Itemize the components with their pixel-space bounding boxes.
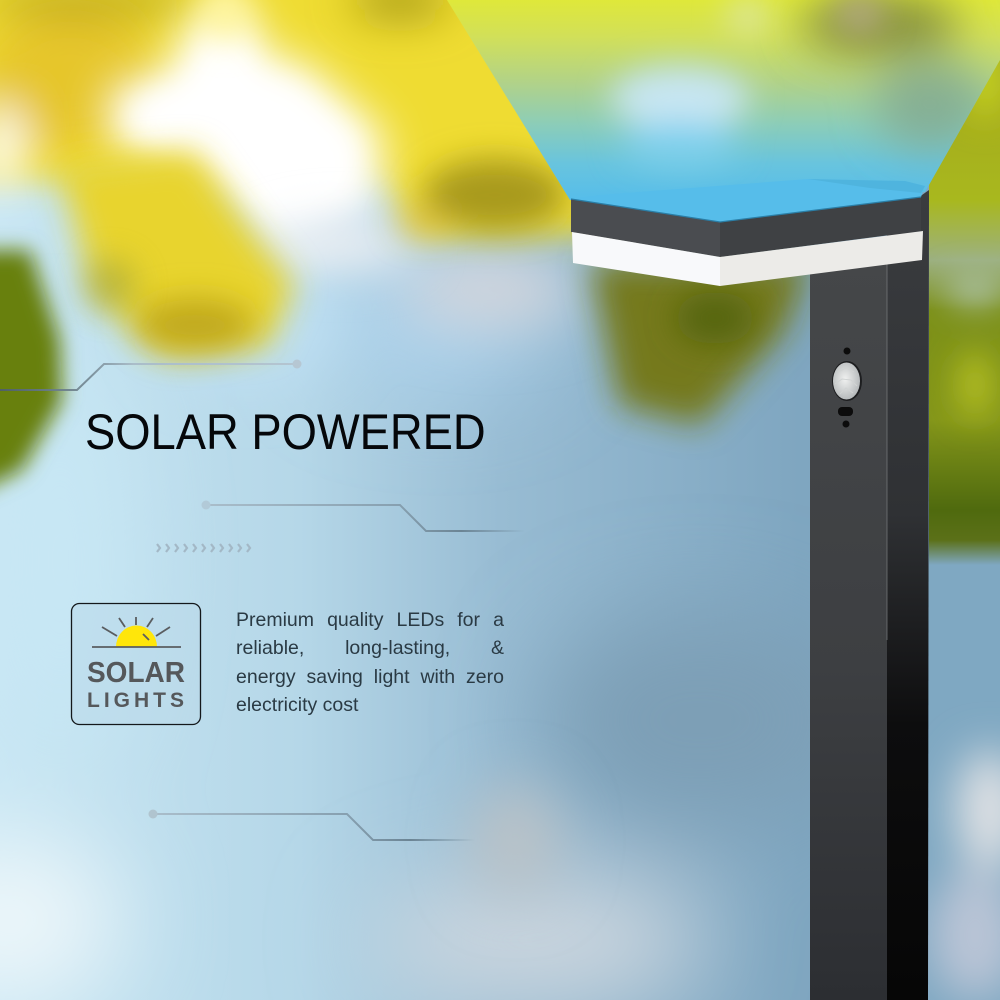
icon: rising sun	[92, 617, 181, 647]
description text: LEDs	[397, 609, 444, 631]
description text: long-lasting,	[345, 637, 450, 659]
badge subtext: LIGHTS	[87, 689, 184, 712]
chevron row	[157, 544, 250, 552]
badge: solar lights	[72, 604, 200, 724]
foliage: green leaf behind post	[590, 262, 810, 425]
foliage: yellow canopy	[0, 0, 700, 235]
description text: saving	[307, 666, 363, 688]
foliage: sun glow	[105, 0, 420, 271]
decorative circuit line middle	[202, 500, 525, 531]
foliage: green leaf left	[0, 250, 62, 495]
description text: with	[420, 666, 455, 688]
description text: a	[493, 609, 504, 631]
description text: Premium	[236, 609, 314, 631]
foliage: olive patch behind lamp head	[397, 159, 567, 234]
decorative circuit line bottom	[148, 810, 475, 840]
foliage: right edge	[929, 0, 1000, 1000]
description text: light	[374, 666, 410, 688]
motion sensor	[832, 348, 862, 428]
description text: for	[457, 609, 480, 631]
description text: electricity cost	[236, 694, 358, 716]
decorative circuit line top	[0, 360, 302, 390]
description text: energy	[236, 666, 296, 688]
description text	[236, 609, 504, 716]
description text: zero	[466, 666, 504, 688]
badge text: SOLAR	[87, 657, 185, 689]
light beam	[440, 0, 1000, 200]
description text: &	[491, 637, 504, 659]
foliage: yellow leaf	[58, 150, 295, 355]
title: SOLAR POWERED	[85, 404, 486, 460]
description text: quality	[327, 609, 383, 631]
lamp head	[571, 179, 925, 286]
description text: reliable,	[236, 637, 304, 659]
lamp post	[810, 190, 929, 1000]
